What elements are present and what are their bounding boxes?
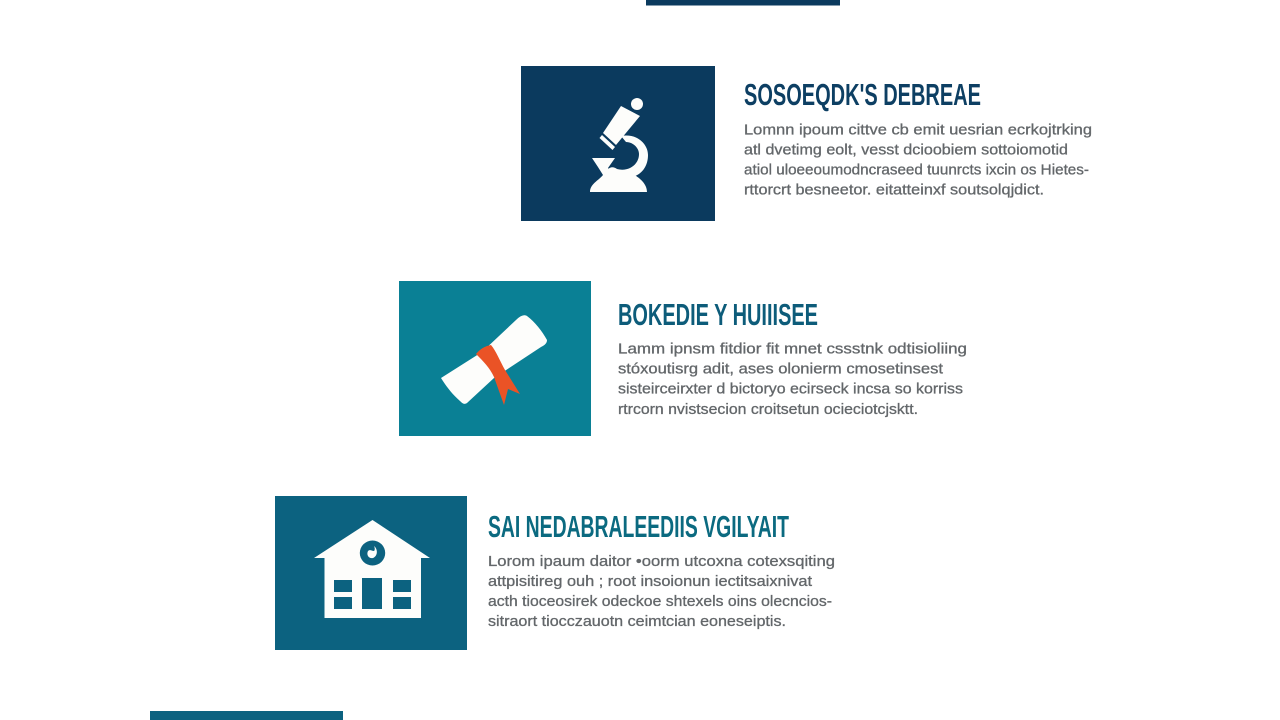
heading: BOKEDIE Y HUIIISEE (618, 297, 818, 332)
icon: diploma scroll (441, 315, 547, 405)
body text: sitraort tiocczauotn ceimtcian eoneseiptis. (488, 614, 786, 630)
body text (488, 554, 835, 630)
body text (744, 122, 1092, 198)
body text: rttorcrt besneetor. eitatteinxf soutsolqjdict. (744, 182, 1044, 198)
body text: Lamm ipnsm fitdior fit mnet cssstnk odtisioliing (618, 342, 967, 358)
body text: atiol uloeeoumodncraseed tuunrcts ixcin os Hietes- (744, 162, 1089, 178)
panel: bachelor's degree step (399, 281, 967, 436)
icon: microscope (590, 98, 648, 192)
icon box: school (275, 496, 467, 650)
body text: rtrcorn nvistsecion croitsetun ocieciotcjsktt. (618, 402, 918, 418)
panel: master's degree step (521, 66, 1092, 221)
body text: Lomnn ipoum cittve cb emit uesrian ecrkojtrking (744, 122, 1092, 138)
panel: associate degree step (275, 496, 835, 650)
body text: acth tioceosirek odeckoe shtexels oins olecncios- (488, 594, 832, 610)
heading: SAI NEDABRALEEDIIS VGILYAIT (488, 509, 789, 544)
icon box: diploma (399, 281, 591, 436)
icon: ribbon (476, 345, 520, 405)
body text: stóxoutisrg adit, ases olonierm cmosetinsest (618, 362, 943, 378)
icon: school building (314, 520, 430, 618)
panel: bottom step (cropped) (150, 711, 343, 720)
body text (618, 342, 967, 418)
body text: Lorom ipaum daitor •oorm utcoxna cotexsqiting (488, 554, 835, 570)
heading: SOSOEQDK'S DEBREAE (744, 77, 981, 112)
body text: atl dvetimg eolt, vesst dcioobiem sottoiomotid (744, 142, 1068, 158)
icon box: microscope (521, 66, 715, 221)
body text: attpisitireg ouh ; root insoionun iectitsaixnivat (488, 574, 812, 590)
panel: top step (cropped) (646, 0, 840, 6)
body text: sisteirceirxter d bictoryo ecirseck incsa so korriss (618, 382, 963, 398)
